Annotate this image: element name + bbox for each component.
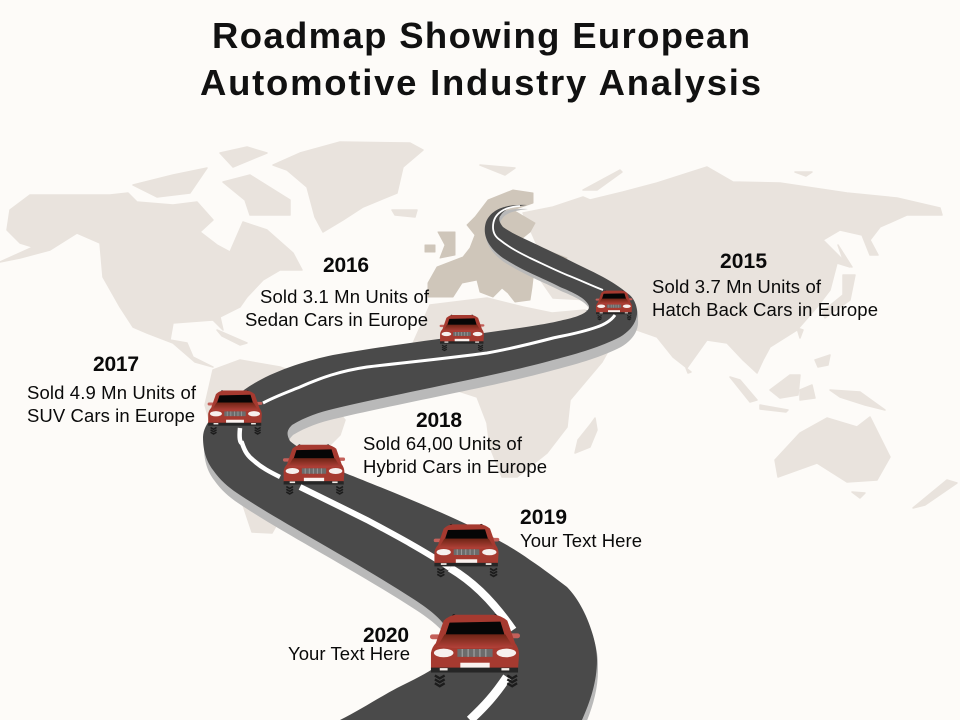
label: 2020: 2020	[363, 624, 409, 647]
label: 2017: 2017	[93, 353, 139, 376]
map: Madagascar	[575, 418, 597, 453]
map: Greenland	[273, 142, 423, 232]
title: Roadmap Showing European	[212, 15, 750, 56]
car 2016	[440, 315, 484, 351]
label: 2016: Sold 3.1 Mn Units of	[260, 286, 430, 307]
label: 2019: Your Text Here	[520, 530, 642, 551]
map: Asia	[523, 167, 942, 373]
map: South America	[205, 360, 345, 533]
label: 2018	[363, 409, 547, 477]
label: 2019: 2019	[520, 506, 567, 529]
map: Arctic islands	[133, 147, 417, 345]
road shoulder shadow	[204, 209, 638, 720]
label: 2016	[245, 254, 430, 330]
label: 2018: 2018	[416, 409, 462, 432]
road	[203, 205, 638, 720]
label: 2015: Hatch Back Cars in Europe	[652, 299, 878, 320]
label: 2020: Your Text Here	[288, 643, 410, 664]
label: 2016: Sedan Cars in Europe	[245, 309, 428, 330]
label: 2018: Sold 64,00 Units of	[363, 433, 523, 454]
map: New Zealand	[913, 480, 957, 508]
map: North America	[0, 193, 302, 367]
world map backdrop	[0, 142, 957, 533]
car 2015	[596, 291, 632, 320]
car 2018	[283, 445, 345, 494]
label: 2016: 2016	[323, 254, 369, 277]
label: 2019	[520, 506, 642, 551]
map: Australia	[775, 417, 890, 498]
label: 2018: Hybrid Cars in Europe	[363, 456, 547, 477]
label: 2017	[27, 353, 197, 426]
label: 2015: 2015	[720, 250, 767, 273]
title: Automotive Industry Analysis	[200, 62, 761, 103]
label: 2020	[288, 624, 410, 664]
car 2020	[430, 615, 520, 686]
label: 2017: SUV Cars in Europe	[27, 405, 195, 426]
label: 2017: Sold 4.9 Mn Units of	[27, 382, 197, 403]
car 2019	[434, 524, 499, 576]
map: Asia-Pacific islands	[480, 165, 885, 412]
map: Africa	[410, 298, 620, 477]
label: 2015	[652, 250, 878, 320]
title	[200, 15, 761, 103]
road centre line	[240, 206, 615, 720]
car 2017	[208, 391, 262, 434]
road surface	[203, 205, 637, 720]
label: 2015: Sold 3.7 Mn Units of	[652, 276, 822, 297]
map: highlighted Europe	[425, 190, 567, 302]
